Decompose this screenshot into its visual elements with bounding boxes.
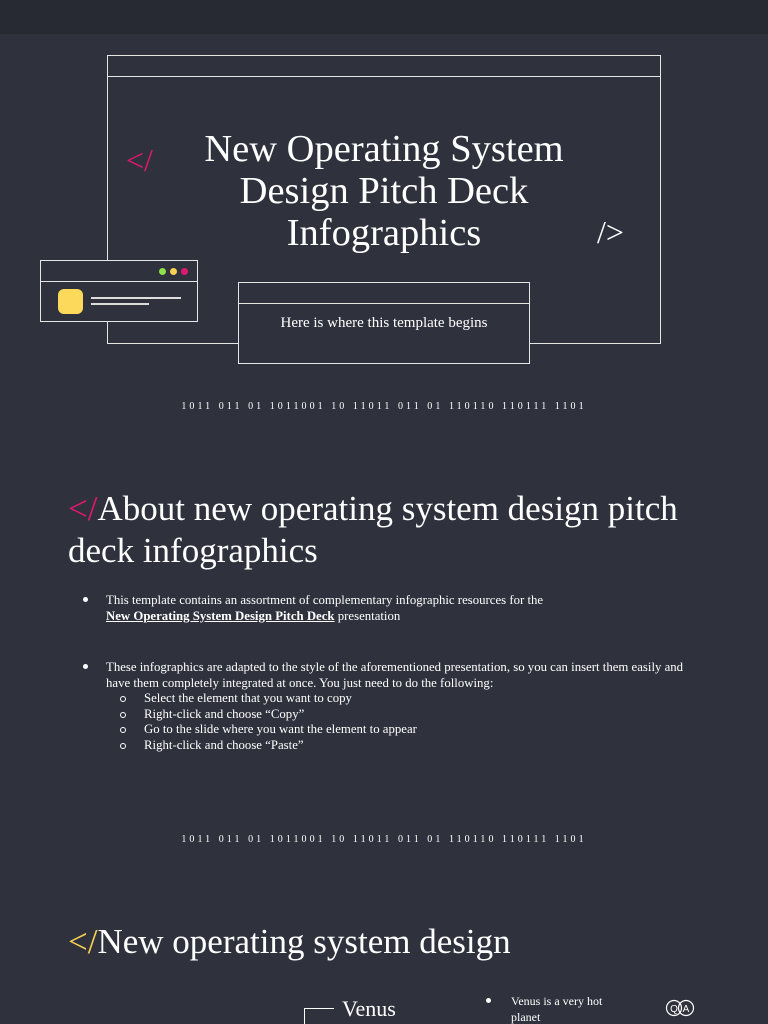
bullet text 1: This template contains an assortment of complementary infographic resources for the [106, 593, 543, 607]
about heading: </About new operating system design pitch deck infographics [68, 489, 678, 570]
bullet text 2: Go to the slide where you want the element to appear [144, 722, 417, 736]
code bracket right: /> [597, 214, 624, 250]
bullet text 1 [83, 593, 543, 622]
title: New Operating System Design Pitch Deck Infographics [204, 128, 564, 254]
venus label [304, 996, 396, 1024]
venus label: Venus [342, 996, 396, 1021]
small window icon [40, 260, 198, 322]
section heading: </New operating system design [68, 922, 511, 961]
bullet text 2: Right-click and choose “Paste” [144, 738, 304, 752]
top bar [0, 0, 768, 34]
code bracket left: </ [126, 142, 153, 178]
bullet text 1: New Operating System Design Pitch Deck presentation [106, 608, 400, 622]
binary line 1: 1011 011 01 1011001 10 11011 011 01 110110 110111 1101 [181, 401, 587, 412]
icon: Q&A: A [683, 1004, 690, 1015]
binary line 2: 1011 011 01 1011001 10 11011 011 01 110110 110111 1101 [181, 834, 587, 845]
icon: Q&A: Q [670, 1004, 678, 1015]
bullet text 2: Select the element that you want to copy [144, 691, 352, 705]
icon: Q&A [666, 1000, 694, 1016]
bullet text 2: These infographics are adapted to the style of the aforementioned presentation, so you can insert them easily and have them completely integrated at once. You just need to do the following: [106, 660, 683, 690]
main window frame [107, 55, 661, 344]
subtitle window [238, 282, 530, 364]
bullet text 2: Right-click and choose “Copy” [144, 706, 304, 720]
bullet text 2 [83, 660, 683, 752]
subtitle window: Here is where this template begins [280, 315, 488, 331]
venus bullet: Venus is a very hot planet [511, 994, 602, 1024]
